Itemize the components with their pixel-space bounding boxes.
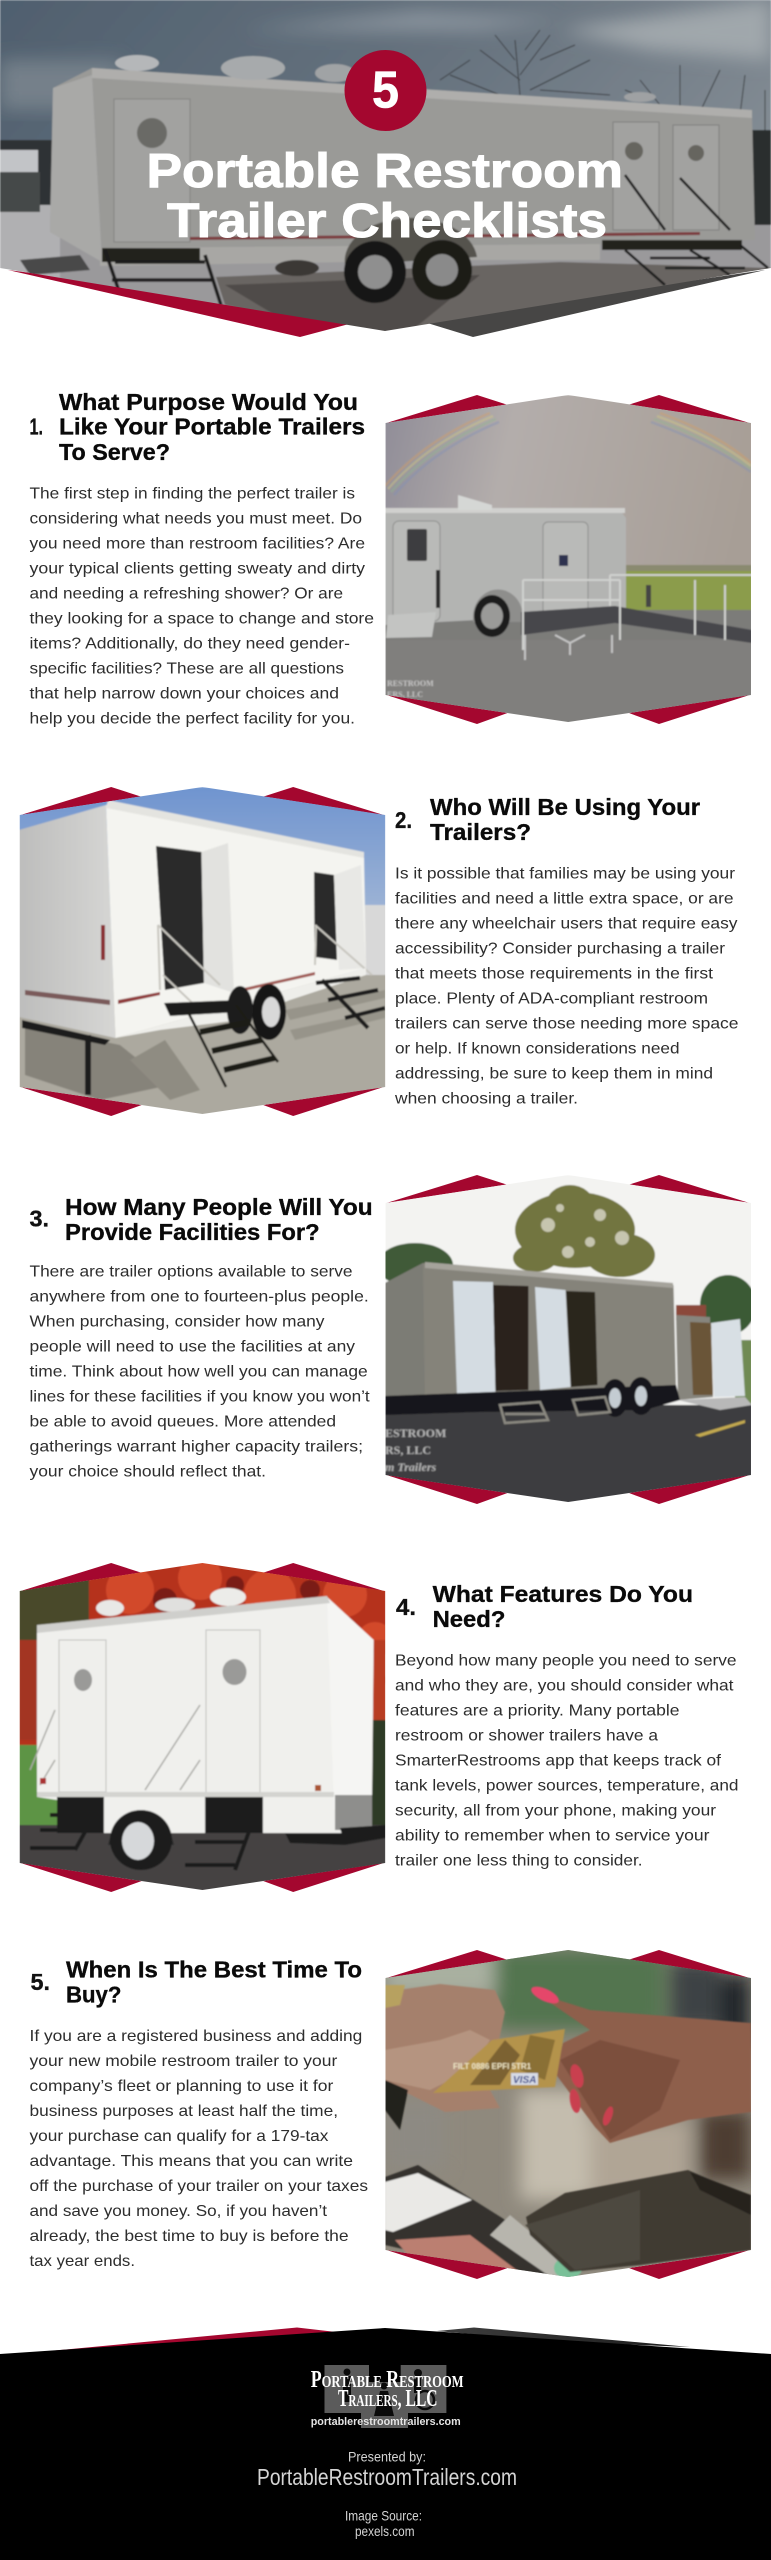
body text 1: help you decide the perfect facility for you. bbox=[30, 710, 355, 727]
body text 1: and needing a refreshing shower? Or are bbox=[30, 585, 343, 602]
heading 5: 5. bbox=[30, 1969, 50, 1995]
body text 4: Beyond how many people you need to serve bbox=[395, 1653, 737, 1670]
heading 1: Like Your Portable Trailers bbox=[59, 414, 365, 440]
body text 5: business purposes at least half the time, bbox=[30, 2103, 338, 2120]
body text 3 bbox=[30, 1264, 370, 1481]
body text 2: when choosing a trailer. bbox=[394, 1090, 578, 1107]
body text 3: your choice should reflect that. bbox=[30, 1464, 266, 1481]
body text 5: already, the best time to buy is before the bbox=[30, 2228, 349, 2245]
heading 1: What Purpose Would You bbox=[59, 389, 358, 415]
hero header bbox=[0, 0, 771, 340]
body text 2: place. Plenty of ADA-compliant restroom bbox=[395, 990, 708, 1007]
body text 5: tax year ends. bbox=[30, 2253, 135, 2270]
body text 4: security, all from your phone, making your bbox=[395, 1803, 717, 1820]
hero grey accent band bbox=[424, 270, 765, 337]
body text 2: facilities and need a little extra space, or are bbox=[395, 890, 734, 907]
body text 1: The first step in finding the perfect trailer is bbox=[30, 485, 355, 502]
presented by label: Presented by: bbox=[348, 2449, 426, 2465]
section 2 bbox=[19, 787, 739, 1116]
body text 1 bbox=[30, 485, 374, 727]
photo 1 bbox=[385, 395, 752, 730]
section 4 bbox=[19, 1556, 738, 1895]
body text 4 bbox=[395, 1653, 738, 1870]
red corners 2 bbox=[21, 787, 384, 1116]
body text 2: that meets those requirements in the first bbox=[395, 965, 714, 982]
heading 3 bbox=[30, 1194, 373, 1245]
image source label: Image Source: bbox=[345, 2508, 422, 2524]
image 3: taupe trailer on asphalt bbox=[377, 1175, 756, 1505]
image 5: credit card payment between hands bbox=[385, 1950, 752, 2280]
logo wordmark: Portable Restroom bbox=[311, 2367, 464, 2393]
main title: Portable Restroom bbox=[146, 145, 623, 198]
red corners 5 bbox=[386, 1950, 750, 2279]
logo wordmark: portablerestroomtrailers.com bbox=[311, 2416, 461, 2428]
footer red accent bbox=[50, 2328, 336, 2351]
heading 1: To Serve? bbox=[59, 439, 170, 465]
body text 5: company’s fleet or planning to use it for bbox=[30, 2078, 334, 2095]
photo 3 bbox=[377, 1175, 756, 1505]
heading 2 bbox=[395, 794, 700, 845]
footer bbox=[0, 2328, 771, 2560]
photo 3: m Trailers bbox=[385, 1460, 437, 1474]
hero red accent band bbox=[8, 270, 349, 337]
photo 4 bbox=[19, 1556, 393, 1895]
heading 1 bbox=[30, 389, 365, 465]
photo 1: ERS, LLC bbox=[387, 690, 423, 699]
company logo bbox=[311, 2365, 464, 2428]
body text 3: lines for these facilities if you know you won’t bbox=[30, 1389, 370, 1406]
footer grey accent bbox=[437, 2328, 690, 2347]
body text 3: When purchasing, consider how many bbox=[30, 1314, 324, 1331]
red corners 4 bbox=[21, 1563, 384, 1892]
body text 5: and save you money. So, if you haven’t bbox=[30, 2203, 328, 2220]
body text 5 bbox=[30, 2028, 368, 2270]
section 5 bbox=[30, 1950, 752, 2280]
heading 5: When Is The Best Time To bbox=[66, 1957, 362, 1983]
body text 2: addressing, be sure to keep them in mind bbox=[395, 1065, 713, 1082]
body text 2: there any wheelchair users that require easy bbox=[395, 915, 738, 932]
heading 5: Buy? bbox=[66, 1982, 121, 2008]
number badge: 5 bbox=[372, 62, 399, 120]
logo wordmark: Trailers, LLC bbox=[338, 2386, 438, 2412]
image 4: white two-door trailer with red foliage bbox=[19, 1556, 393, 1895]
photo 5: VISA bbox=[513, 2075, 536, 2086]
body text 1: that help narrow down your choices and bbox=[30, 685, 339, 702]
body text 4: SmarterRestrooms app that keeps track of bbox=[395, 1753, 722, 1770]
photo 3: RS, LLC bbox=[385, 1443, 431, 1457]
body text 4: trailer one less thing to consider. bbox=[395, 1853, 643, 1870]
body text 1: specific facilities? These are all questions bbox=[30, 660, 344, 677]
section 3 bbox=[30, 1175, 756, 1505]
heading 3: How Many People Will You bbox=[65, 1194, 373, 1220]
hero photo: trailer in snow bbox=[0, 0, 771, 340]
heading 4: Need? bbox=[433, 1606, 505, 1632]
heading 4: What Features Do You bbox=[433, 1581, 693, 1607]
body text 3: There are trailer options available to serve bbox=[30, 1264, 353, 1281]
heading 3: 3. bbox=[30, 1206, 49, 1232]
photo 1: RESTROOM bbox=[387, 679, 434, 688]
logo silhouettes bbox=[343, 2368, 434, 2416]
body text 1: you need more than restroom facilities? Are bbox=[30, 535, 365, 552]
image 2: white trailer with open doors bbox=[19, 787, 386, 1116]
body text 4: ability to remember when to service your bbox=[395, 1828, 710, 1845]
body text 1: considering what needs you must meet. Do bbox=[30, 510, 362, 527]
body text 2: trailers can serve those needing more space bbox=[395, 1015, 739, 1032]
body text 5: If you are a registered business and adding bbox=[30, 2028, 362, 2045]
heading 5 bbox=[30, 1957, 362, 2008]
body text 5: your purchase can qualify for a 179-tax bbox=[30, 2128, 328, 2145]
body text 5: off the purchase of your trailer on your taxes bbox=[30, 2178, 368, 2195]
red corners 3 bbox=[386, 1175, 750, 1504]
body text 4: and who they are, you should consider what bbox=[395, 1678, 734, 1695]
body text 2: accessibility? Consider purchasing a trailer bbox=[395, 940, 726, 957]
main title bbox=[146, 145, 623, 248]
heading 4: 4. bbox=[396, 1594, 416, 1620]
body text 2 bbox=[394, 865, 739, 1107]
red corners 1 bbox=[386, 395, 750, 724]
body text 2: Is it possible that families may be using your bbox=[395, 865, 736, 882]
section 1 bbox=[30, 389, 752, 730]
body text 3: people will need to use the facilities at any bbox=[30, 1339, 355, 1356]
body text 3: gatherings warrant higher capacity trailers; bbox=[30, 1439, 363, 1456]
body text 4: features are a priority. Many portable bbox=[395, 1703, 680, 1720]
body text 4: restroom or shower trailers have a bbox=[395, 1728, 658, 1745]
heading 2: Trailers? bbox=[430, 819, 531, 845]
heading 2: 2. bbox=[395, 807, 412, 833]
number badge bbox=[344, 50, 426, 131]
image 1: silver trailer with rainbow and ramp bbox=[385, 395, 752, 730]
photo 2 bbox=[19, 787, 386, 1115]
photo 5 bbox=[385, 1950, 752, 2280]
footer black panel bbox=[0, 2328, 771, 2560]
body text 4: tank levels, power sources, temperature, and bbox=[395, 1778, 738, 1795]
photo 5: FILT 0886 EPFI 5TR1 bbox=[453, 2062, 532, 2071]
body text 3: time. Think about how well you can manage bbox=[30, 1364, 368, 1381]
body text 5: advantage. This means that you can write bbox=[30, 2153, 353, 2170]
body text 3: anywhere from one to fourteen-plus people. bbox=[30, 1289, 369, 1306]
heading 4 bbox=[396, 1581, 693, 1632]
body text 2: or help. If known considerations need bbox=[395, 1040, 680, 1057]
photo 3: ESTROOM bbox=[385, 1426, 446, 1440]
main title: Trailer Checklists bbox=[167, 195, 607, 248]
image source url: pexels.com bbox=[355, 2523, 414, 2539]
website: PortableRestroomTrailers.com bbox=[257, 2464, 517, 2490]
body text 5: your new mobile restroom trailer to your bbox=[30, 2053, 338, 2070]
heading 2: Who Will Be Using Your bbox=[430, 794, 700, 820]
heading 1: 1. bbox=[30, 414, 43, 440]
heading 3: Provide Facilities For? bbox=[65, 1219, 320, 1245]
body text 3: be able to avoid queues. More attended bbox=[30, 1414, 336, 1431]
logo wordmark bbox=[311, 2367, 464, 2428]
body text 1: items? Additionally, do they need gender- bbox=[30, 635, 350, 652]
body text 1: your typical clients getting sweaty and dirty bbox=[30, 560, 365, 577]
body text 1: they looking for a space to change and store bbox=[30, 610, 374, 627]
